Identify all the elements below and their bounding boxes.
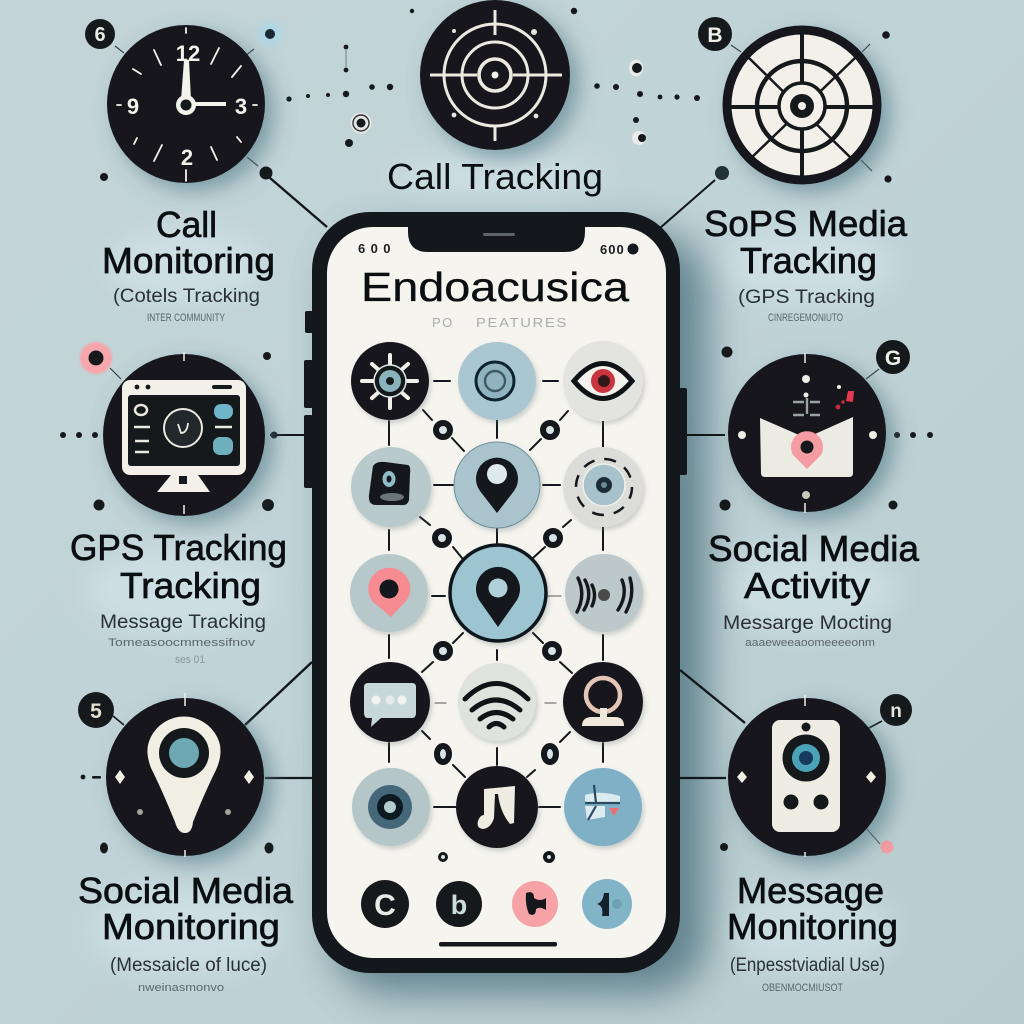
panel: phone	[304, 212, 687, 973]
speaker	[483, 233, 515, 236]
badge: 5	[90, 700, 102, 723]
heading: Activity	[744, 565, 870, 606]
sublabel: (Cotels Tracking	[113, 286, 260, 307]
phone subtitle: PO	[432, 315, 454, 330]
dock icon: tag	[436, 881, 482, 927]
dots	[720, 346, 933, 510]
heading: Social Media	[78, 870, 294, 911]
dots	[694, 31, 892, 183]
badge	[876, 340, 910, 374]
small connector nodes	[435, 423, 560, 861]
heading: SoPS Media	[704, 203, 908, 244]
dock icon: call	[361, 880, 409, 928]
app icon: central pin	[450, 545, 546, 641]
phone shadow	[332, 232, 708, 994]
app icon: wifi	[458, 663, 536, 741]
note: CINREGEMONIUTO	[768, 312, 843, 324]
badge	[698, 17, 732, 51]
phone title: Endoacusica	[361, 264, 629, 310]
heading	[70, 527, 287, 606]
pink dot	[80, 342, 112, 374]
app icon: sun eye	[351, 342, 429, 420]
app icon: abstract chat	[564, 768, 642, 846]
heading: GPS Tracking	[70, 527, 287, 568]
panel: social media monitoring	[78, 692, 294, 994]
heading: Monitoring	[727, 906, 898, 947]
sublabel: (GPS Tracking	[738, 287, 875, 308]
badge	[78, 692, 114, 728]
app icon: eye	[563, 341, 643, 421]
app icon: pink pin	[350, 554, 428, 632]
heading: Monitoring	[102, 906, 280, 947]
clock icon: 3	[235, 94, 247, 119]
badge: B	[707, 24, 723, 47]
clock icon: 12	[176, 41, 200, 66]
target icon	[420, 0, 570, 150]
panel: sops media tracking	[694, 17, 908, 324]
glow dot	[258, 22, 282, 46]
monitor icon	[103, 352, 265, 516]
status left: 600	[358, 241, 392, 256]
badge: 6	[94, 24, 106, 46]
phone notch	[408, 226, 585, 252]
notes	[108, 637, 256, 666]
heading	[727, 870, 898, 947]
heading	[704, 203, 908, 281]
app icon: target ring	[458, 342, 536, 420]
dots	[60, 352, 278, 511]
dock icon: call: C	[374, 889, 396, 922]
panel: social media activity	[708, 340, 933, 649]
phone screen	[327, 227, 666, 958]
sublabel: Message Tracking	[100, 612, 266, 633]
badge	[880, 694, 912, 726]
sublabel: (Messaicle of luce)	[110, 955, 267, 976]
notes: ses 01	[175, 654, 205, 666]
app icon: camera lens	[352, 768, 430, 846]
note: nweinasmonvo	[138, 982, 224, 994]
heading: Message	[737, 870, 884, 911]
app icon: music note	[456, 766, 538, 848]
notes: Tomeasoocmmessifnov	[108, 637, 256, 649]
badge: G	[885, 347, 901, 370]
status right	[600, 242, 638, 257]
app icon: ring user	[563, 662, 643, 742]
connector lines in phone	[389, 381, 603, 807]
heading	[708, 528, 920, 606]
app icon: location pin	[454, 442, 540, 528]
clock icon: 2	[181, 145, 193, 170]
heading: Tracking	[740, 240, 877, 281]
badge	[85, 19, 115, 49]
pin icon	[106, 693, 264, 857]
heading: Call Tracking	[387, 156, 603, 197]
scattered dots: top right	[571, 8, 680, 145]
clock icon: 9	[127, 94, 139, 119]
panel: message monitoring	[720, 694, 912, 994]
clock icon	[107, 25, 265, 183]
heading	[102, 204, 275, 281]
badge: n	[890, 701, 902, 722]
app icon: camera blob	[351, 447, 431, 527]
heading: Call	[156, 204, 217, 245]
panel: gps tracking	[60, 342, 287, 666]
home indicator	[439, 942, 557, 946]
status right: 600	[600, 242, 625, 257]
heading	[78, 870, 294, 947]
target icon	[727, 30, 877, 180]
panel: call tracking	[387, 0, 603, 197]
dock icon: blue	[582, 879, 632, 929]
scattered dots: top left	[286, 9, 414, 147]
heading: Social Media	[708, 528, 920, 569]
dock icon: pink	[512, 881, 558, 927]
dots	[720, 840, 894, 854]
dock icon: tag: b	[451, 890, 467, 920]
heading: Monitoring	[102, 240, 275, 281]
app icon: sound waves	[565, 554, 643, 632]
connector lines outside phone	[245, 178, 745, 778]
phone subtitle	[432, 315, 568, 330]
note: aaaeweeaoomeeeeonm	[745, 637, 875, 649]
app icon: message bubble	[350, 662, 430, 742]
note: INTER COMMUNITY	[147, 312, 225, 324]
label glows	[85, 157, 900, 972]
phone side buttons	[304, 311, 687, 488]
sublabel: (Enpesstviadial Use)	[730, 955, 885, 976]
phone subtitle: PEATURES	[476, 315, 568, 330]
dots	[81, 775, 273, 854]
app icon: lens	[563, 447, 643, 527]
heading: Tracking	[120, 565, 261, 606]
note: OBENMOCMIUSOT	[762, 982, 843, 994]
panel: call monitoring	[85, 19, 282, 324]
remote icon	[728, 695, 886, 857]
dots	[100, 166, 272, 181]
phone body	[312, 212, 680, 973]
sublabel: Messarge Mocting	[723, 613, 892, 634]
envelope icon	[728, 353, 886, 513]
